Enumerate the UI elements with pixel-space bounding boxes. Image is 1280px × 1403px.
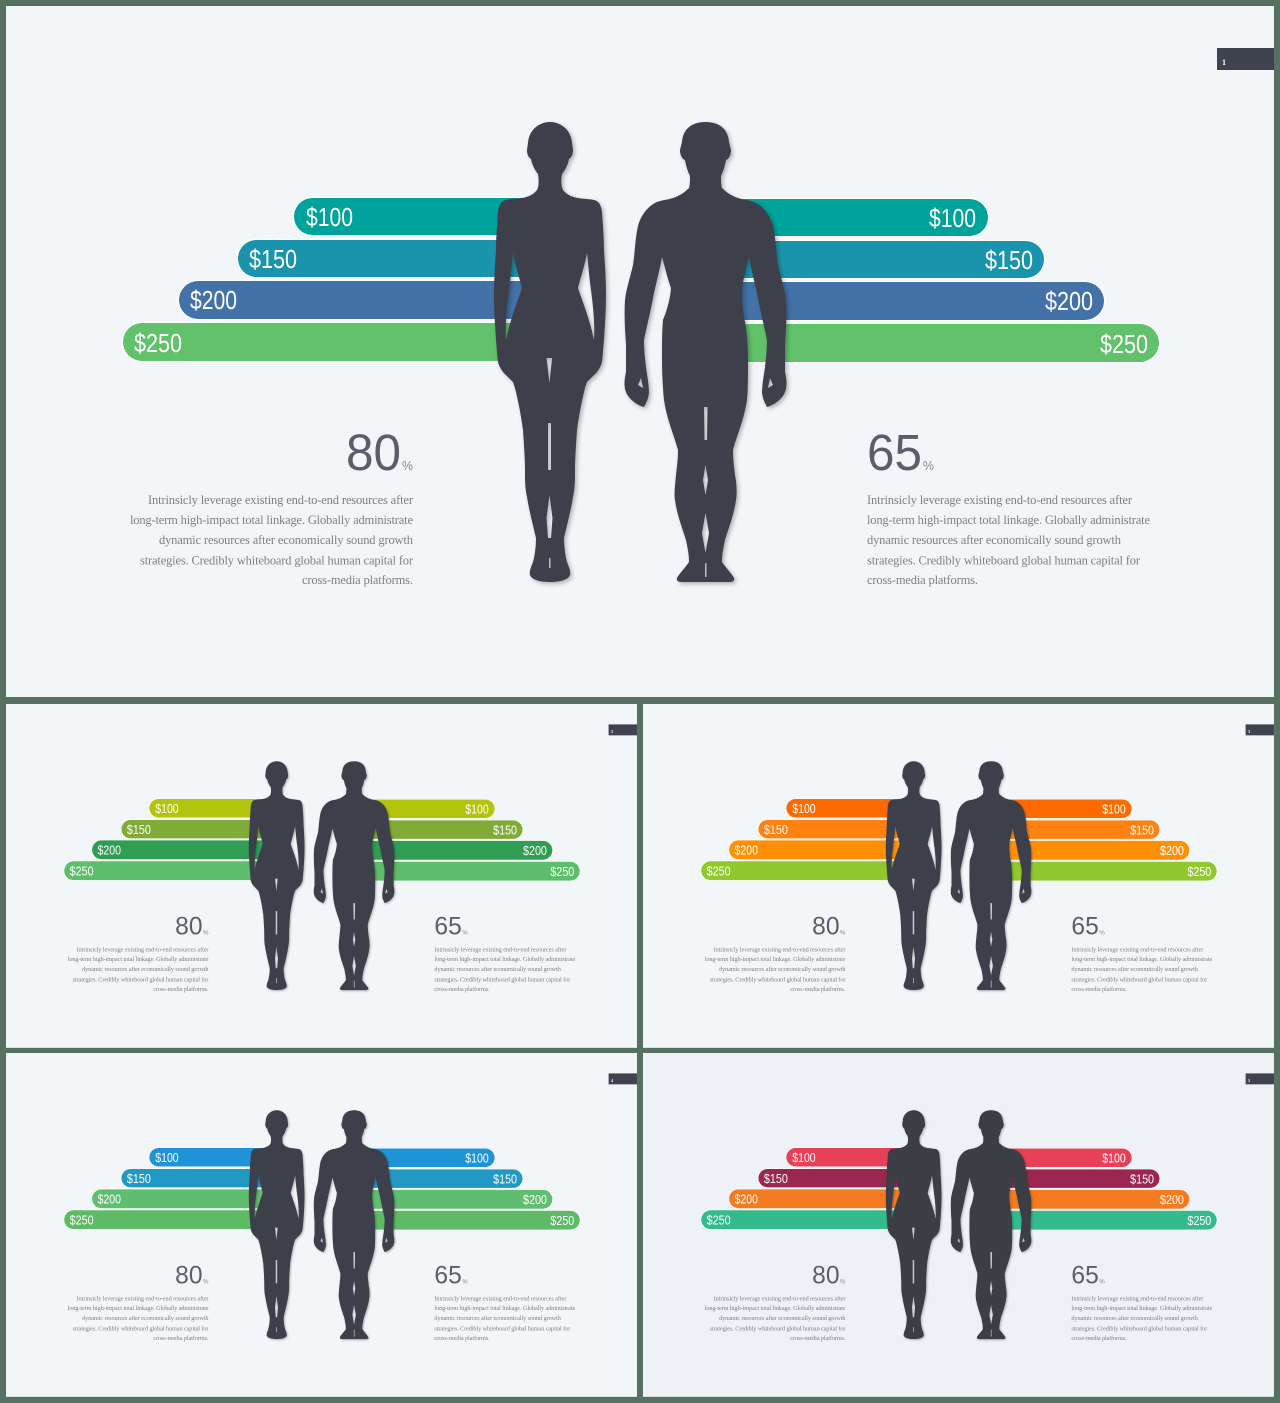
slide 5 right price bars [998,1149,1217,1230]
slide 2 left text block [68,946,209,993]
slide 2 icon: female silhouette [249,761,305,990]
slide 3 left text block: dynamic resources after economically sound growth [719,966,846,973]
slide 1 icon: female silhouette [494,122,606,582]
slide 2 right text block: dynamic resources after economically sound growth [434,966,562,973]
slide 1 background [6,6,1274,697]
slide 4 icon: female silhouette [249,1110,305,1339]
slide 2 left text block: cross-media platforms. [153,986,209,993]
slide 2 bar labels: $250 [550,864,574,879]
slide 4 left price bars [64,1148,279,1229]
slide 4 bar labels: $150 [493,1171,517,1186]
slide 5 page tab [1246,1073,1274,1084]
slide 2 stat 80%: 80 [175,912,203,940]
slide 1 right text block: Intrinsicly leverage existing end-to-end resources after [867,493,1133,507]
slide 2 bar labels: $150 [493,822,517,837]
slide 4 right text block [434,1295,575,1342]
slide 2 left text block: strategies. Credibly whiteboard global human capital for [73,976,209,983]
slide 3 right text block [1071,946,1212,993]
slide 5 icon: male silhouette [951,1110,1031,1339]
slide 5 bar labels: $250 [707,1213,731,1228]
slide 3 page tab: 3 [1248,729,1250,734]
slide 4 bar labels: $100 [465,1150,489,1165]
slide 5: red and teal thumbnail [643,1053,1274,1397]
slide 1 bar labels: $150 [985,245,1033,275]
slide 4 bar labels: $100 [155,1150,179,1165]
slide 1 icon: male silhouette [624,122,786,582]
slide 5 left text block: strategies. Credibly whiteboard global human capital for [710,1325,846,1332]
slide 4 stat 65%: % [462,1278,468,1285]
slide 1 bar labels: $200 [190,285,237,315]
slide 3 stat 65%: % [1099,929,1105,936]
slide 5 stat 65%: % [1099,1278,1105,1285]
slide 4 page tab: 4 [611,1078,613,1083]
slide 1 bar labels [134,202,1148,359]
slide 1 bar labels: $100 [929,203,976,233]
slide 2 bar labels: $200 [523,843,547,858]
slide 3 right text block: long-term high-impact total linkage. Globally administrate [1071,956,1212,963]
slide 5 left text block: Intrinsicly leverage existing end-to-end resources after [714,1295,846,1302]
slide 4 bar labels [70,1150,574,1228]
slide 5 left text block: cross-media platforms. [790,1335,846,1342]
slide 2 background [6,704,637,1048]
slide 3 stat 65%: 65 [1071,912,1099,940]
slide 5 right text block: cross-media platforms. [1071,1335,1127,1342]
slide 4 left text block: dynamic resources after economically sound growth [82,1315,209,1322]
slide 4 left text block: Intrinsicly leverage existing end-to-end resources after [77,1295,209,1302]
slide 3 right text block: Intrinsicly leverage existing end-to-end resources after [1071,946,1204,953]
slide 2 bar labels: $100 [465,801,489,816]
slide 3 left text block: strategies. Credibly whiteboard global human capital for [710,976,846,983]
slide 1 bar labels: $250 [1100,329,1148,359]
slide 5 stat 65%: 65 [1071,1261,1099,1289]
slide 2 left text block: Intrinsicly leverage existing end-to-end resources after [77,946,209,953]
slide 1 stat 80%: 80 [346,424,401,481]
slide 2 left price bars [64,799,279,880]
slide 1 stat 65%: % [923,458,934,473]
slide 1 bar labels: $250 [134,328,182,358]
slide 4 bar labels: $150 [127,1171,151,1186]
slide 5 bar labels [707,1150,1211,1228]
slide 2 left text block: long-term high-impact total linkage. Globally administrate [68,956,209,963]
slide 2 page tab: 2 [611,729,613,734]
slide 2 right text block [434,946,575,993]
slide 5 bar labels: $250 [1187,1213,1211,1228]
slide 1 bar labels: $200 [1045,286,1093,316]
slide 2 stat 65%: % [462,929,468,936]
slide 1 right price bars [720,199,1159,362]
slide 2 bar labels [70,801,574,879]
slide 1 right text block: dynamic resources after economically sound growth [867,533,1122,547]
slide 1 stat 80%: % [402,458,413,473]
slide 4 right text block: dynamic resources after economically sound growth [434,1315,562,1322]
slide 1 left text block [130,493,414,587]
slide 1 page tab: 1 [1222,58,1226,67]
slide 3 bar labels: $200 [1160,843,1184,858]
slide 1 right text block: strategies. Credibly whiteboard global human capital for [867,554,1141,568]
slide 3: orange thumbnail [643,704,1274,1048]
slide 1 left text block: dynamic resources after economically sound growth [159,533,414,547]
slide 2 stat 65%: 65 [434,912,462,940]
slide 5 left text block [705,1295,846,1342]
slide 5 right text block [1071,1295,1212,1342]
slide 4 right text block: cross-media platforms. [434,1335,490,1342]
slide 4 left text block: cross-media platforms. [153,1335,209,1342]
slide 5 bar labels: $100 [1102,1150,1126,1165]
slide 2 stat 80%: % [203,929,209,936]
slide 4 stat 65%: 65 [434,1261,462,1289]
slide 3 right price bars [998,800,1217,881]
slide 4 bar labels: $200 [523,1192,547,1207]
slide 3 stat 80%: % [840,929,846,936]
slide 3 bar labels [707,801,1211,879]
slide 5 bar labels: $100 [792,1150,816,1165]
slide 5 bar labels: $150 [764,1171,788,1186]
slide 1 left price bars [123,198,554,361]
slide 2 right text block: strategies. Credibly whiteboard global human capital for [434,976,571,983]
slide 5 icon: female silhouette [886,1110,942,1339]
slide 2 right price bars [361,800,580,881]
slide 5 right text block: Intrinsicly leverage existing end-to-end resources after [1071,1295,1204,1302]
slide 4 stat 80%: % [203,1278,209,1285]
slide 3 page tab [1246,724,1274,735]
slide 4 bar labels: $200 [98,1191,121,1206]
slide 1 bar labels: $150 [249,244,297,274]
slide 3 icon: female silhouette [886,761,942,990]
slide 5 bar labels: $150 [1130,1171,1154,1186]
slide 4 background [6,1053,637,1397]
slide 3 stat 80%: 80 [812,912,840,940]
slide 3 left text block [705,946,846,993]
slide 4 icon: male silhouette [314,1110,394,1339]
slide 3 bar labels: $250 [707,864,731,879]
slide 3 background [643,704,1274,1048]
slide 4 page tab [609,1073,637,1084]
slide 5 background [643,1053,1274,1397]
slide 4 right price bars [361,1149,580,1230]
slide 1 page tab [1217,48,1274,70]
slide 3 right text block: cross-media platforms. [1071,986,1127,993]
slide 3 left text block: Intrinsicly leverage existing end-to-end resources after [714,946,846,953]
slide 5 bar labels: $200 [1160,1192,1184,1207]
slide 4 bar labels: $250 [550,1213,574,1228]
slide 3 bar labels: $100 [1102,801,1126,816]
slide 4: blue and green thumbnail [6,1053,637,1397]
slide 3 bar labels: $250 [1187,864,1211,879]
slide 3 bar labels: $200 [735,842,758,857]
slide 1 right text block: cross-media platforms. [867,573,978,587]
slide 4 right text block: Intrinsicly leverage existing end-to-end resources after [434,1295,567,1302]
slide 1 left text block: cross-media platforms. [302,573,413,587]
slide 5 right text block: strategies. Credibly whiteboard global human capital for [1071,1325,1208,1332]
slide 3 icon: male silhouette [951,761,1031,990]
slide 2 bar labels: $200 [98,842,121,857]
slide 3 left price bars [701,799,916,880]
slide 2 bar labels: $100 [155,801,179,816]
slide 5 right text block: dynamic resources after economically sound growth [1071,1315,1199,1322]
slide 4 right text block: strategies. Credibly whiteboard global human capital for [434,1325,571,1332]
slide 1 left text block: Intrinsicly leverage existing end-to-end resources after [148,493,414,507]
slide 3 bar labels: $100 [792,801,816,816]
slide 2 bar labels: $250 [70,864,94,879]
slide 2 right text block: cross-media platforms. [434,986,490,993]
slide 2: lime and green thumbnail [6,704,637,1048]
slide 5 right text block: long-term high-impact total linkage. Globally administrate [1071,1305,1212,1312]
slide 4 left text block [68,1295,209,1342]
slide 1 right text block [867,493,1150,587]
slide 1 right text block: long-term high-impact total linkage. Globally administrate [867,513,1150,527]
slide 2 icon: male silhouette [314,761,394,990]
slide 5 page tab: 5 [1248,1078,1250,1083]
slide 4 stat 80%: 80 [175,1261,203,1289]
slide 2 page tab [609,724,637,735]
slide 2 left text block: dynamic resources after economically sound growth [82,966,209,973]
slide 5 left price bars [701,1148,916,1229]
slide 2 bar labels: $150 [127,822,151,837]
slide 5 stat 80%: 80 [812,1261,840,1289]
slide 2 right text block: long-term high-impact total linkage. Globally administrate [434,956,575,963]
slide 5 left text block: dynamic resources after economically sound growth [719,1315,846,1322]
slide 5 left text block: long-term high-impact total linkage. Globally administrate [705,1305,846,1312]
slide 1 stat 65%: 65 [867,424,922,481]
slide 1 bar labels: $100 [306,202,353,232]
slide 3 right text block: strategies. Credibly whiteboard global human capital for [1071,976,1208,983]
slide 1 left text block: long-term high-impact total linkage. Globally administrate [130,513,413,527]
slide 2 right text block: Intrinsicly leverage existing end-to-end resources after [434,946,567,953]
slide 3 bar labels: $150 [1130,822,1154,837]
slide 4 bar labels: $250 [70,1213,94,1228]
slide 3 bar labels: $150 [764,822,788,837]
slide 1 left text block: strategies. Credibly whiteboard global human capital for [140,554,414,568]
slide 3 left text block: cross-media platforms. [790,986,846,993]
slide 1: large main slide [6,6,1274,697]
slide 3 left text block: long-term high-impact total linkage. Globally administrate [705,956,846,963]
slide 4 left text block: strategies. Credibly whiteboard global human capital for [73,1325,209,1332]
slide 5 bar labels: $200 [735,1191,758,1206]
slide 4 right text block: long-term high-impact total linkage. Globally administrate [434,1305,575,1312]
slide 3 right text block: dynamic resources after economically sound growth [1071,966,1199,973]
slide 4 left text block: long-term high-impact total linkage. Globally administrate [68,1305,209,1312]
slide 5 stat 80%: % [840,1278,846,1285]
